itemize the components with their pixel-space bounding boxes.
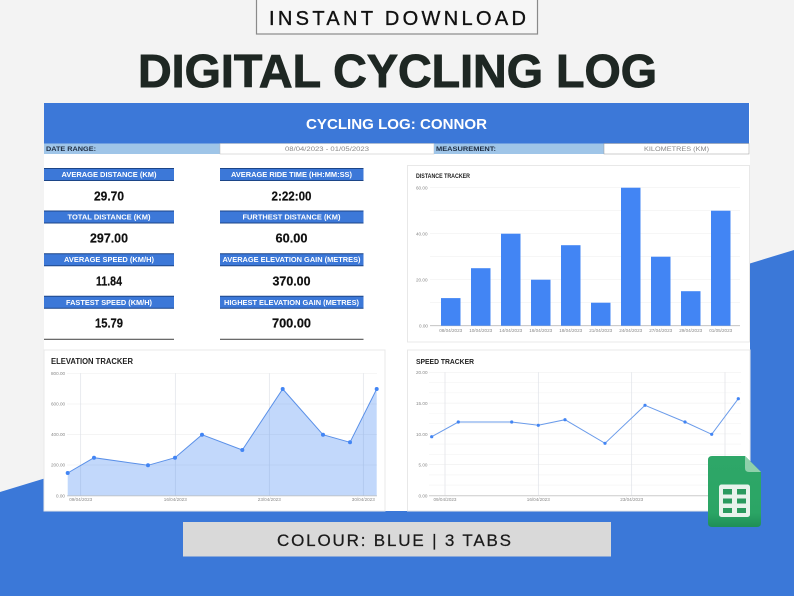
line chart: speed tracker: 0.00 (418, 494, 428, 498)
stat: total distance: 297.00 (90, 232, 128, 246)
bar chart: distance tracker: 01/05/2023 (709, 328, 733, 333)
stat: average distance: 29.70 (94, 190, 124, 204)
bar chart: distance tracker: 27/04/2023 (649, 328, 673, 333)
bar chart: distance tracker: 14/04/2023 (499, 328, 523, 333)
area chart: elevation tracker: ELEVATION TRACKER (51, 357, 133, 366)
area chart: elevation tracker: 30/04/2023 (352, 497, 375, 502)
badge: instant download: INSTANT DOWNLOAD (269, 8, 526, 30)
bar chart: distance tracker: 29/04/2023 (679, 328, 703, 333)
stat: fastest speed: FASTEST SPEED (KM/H) (66, 300, 152, 307)
area chart: elevation tracker: 600.00 (51, 402, 65, 406)
line chart: speed tracker: 5.00 (418, 462, 428, 468)
date range and measurement row: DATE RANGE: (46, 146, 96, 153)
stat: average ride time: 2:22:00 (272, 190, 312, 204)
stat: highest elevation gain: 700.00 (272, 316, 311, 330)
stat: fastest speed: 15.79 (95, 316, 123, 330)
bar chart: distance tracker: 16/04/2023 (529, 328, 553, 333)
stat: average distance: AVERAGE DISTANCE (KM) (62, 172, 156, 179)
area chart: elevation tracker: 800.00 (51, 371, 65, 376)
stat: average speed (44, 254, 174, 288)
badge: instant download (256, 0, 538, 34)
line chart: speed tracker: 10.00 (416, 432, 428, 437)
line chart: speed tracker: 15.00 (416, 401, 428, 406)
icon: google sheets (708, 456, 761, 527)
bar chart: distance tracker: DISTANCE TRACKER (416, 174, 471, 180)
sheet header bar (44, 103, 749, 144)
line chart: speed tracker: 16/04/2023 (527, 497, 550, 502)
stat: highest elevation gain: HIGHEST ELEVATION GAIN (METRES) (224, 300, 359, 307)
date range and measurement row: 08/04/2023 - 01/05/2023 (285, 146, 369, 153)
bar chart: distance tracker: 40.00 (416, 232, 428, 236)
stat: furthest distance: FURTHEST DISTANCE (KM) (242, 214, 340, 222)
stat: highest elevation gain (220, 296, 364, 339)
date range and measurement row: KILOMETRES (KM) (644, 146, 709, 153)
title: DIGITAL CYCLING LOG (138, 45, 657, 97)
date range and measurement row: MEASUREMENT: (436, 146, 496, 153)
banner: colour and tabs: COLOUR: BLUE | 3 TABS (277, 531, 511, 550)
area chart: elevation tracker: 23/04/2023 (258, 497, 281, 502)
line chart: speed tracker: SPEED TRACKER (416, 359, 474, 366)
stat: total distance: TOTAL DISTANCE (KM) (68, 214, 150, 222)
area chart: elevation tracker: 0.00 (56, 494, 65, 498)
spreadsheet panel (44, 103, 750, 511)
line chart: speed tracker: 20.00 (416, 370, 428, 375)
stat: fastest speed (44, 296, 174, 339)
banner: colour and tabs (183, 522, 611, 556)
stat: furthest distance: 60.00 (276, 232, 308, 246)
bar chart: distance tracker: 0.00 (419, 324, 428, 328)
bar chart: distance tracker: 20.00 (416, 278, 428, 282)
stat: average distance (44, 168, 174, 204)
stat: average speed: AVERAGE SPEED (KM/H) (64, 257, 154, 264)
blue diagonal background (0, 250, 794, 596)
bar chart: distance tracker: 60.00 (416, 186, 428, 190)
stat: average ride time (220, 168, 364, 204)
bar chart: distance tracker: 21/04/2023 (589, 328, 613, 333)
date range and measurement row (44, 144, 749, 154)
bar chart: distance tracker: 24/04/2023 (619, 328, 643, 333)
stat: average ride time: AVERAGE RIDE TIME (HH:MM:SS) (231, 172, 352, 179)
stat: furthest distance (220, 211, 364, 246)
stat: average elevation gain: AVERAGE ELEVATION GAIN (METRES) (222, 257, 360, 264)
stat: average elevation gain (220, 254, 364, 288)
bar chart: distance tracker: 18/04/2023 (559, 328, 583, 333)
area chart: elevation tracker: 400.00 (51, 432, 65, 437)
stat: average speed: 11.84 (96, 274, 122, 288)
bar chart: distance tracker (408, 166, 750, 342)
area chart: elevation tracker (44, 350, 385, 511)
stat: average elevation gain: 370.00 (272, 274, 311, 288)
area chart: elevation tracker: 200.00 (51, 462, 65, 468)
area chart: elevation tracker: 16/04/2023 (164, 497, 187, 502)
bar chart: distance tracker: 10/04/2023 (469, 328, 493, 333)
sheet header bar: CYCLING LOG: CONNOR (306, 116, 487, 133)
line chart: speed tracker (408, 350, 750, 511)
stat: total distance (44, 211, 174, 246)
line chart: speed tracker: 09/04/2023 (434, 497, 457, 502)
area chart: elevation tracker: 09/04/2023 (69, 497, 93, 502)
bar chart: distance tracker: 08/04/2023 (439, 328, 463, 333)
line chart: speed tracker: 23/04/2023 (620, 497, 644, 502)
